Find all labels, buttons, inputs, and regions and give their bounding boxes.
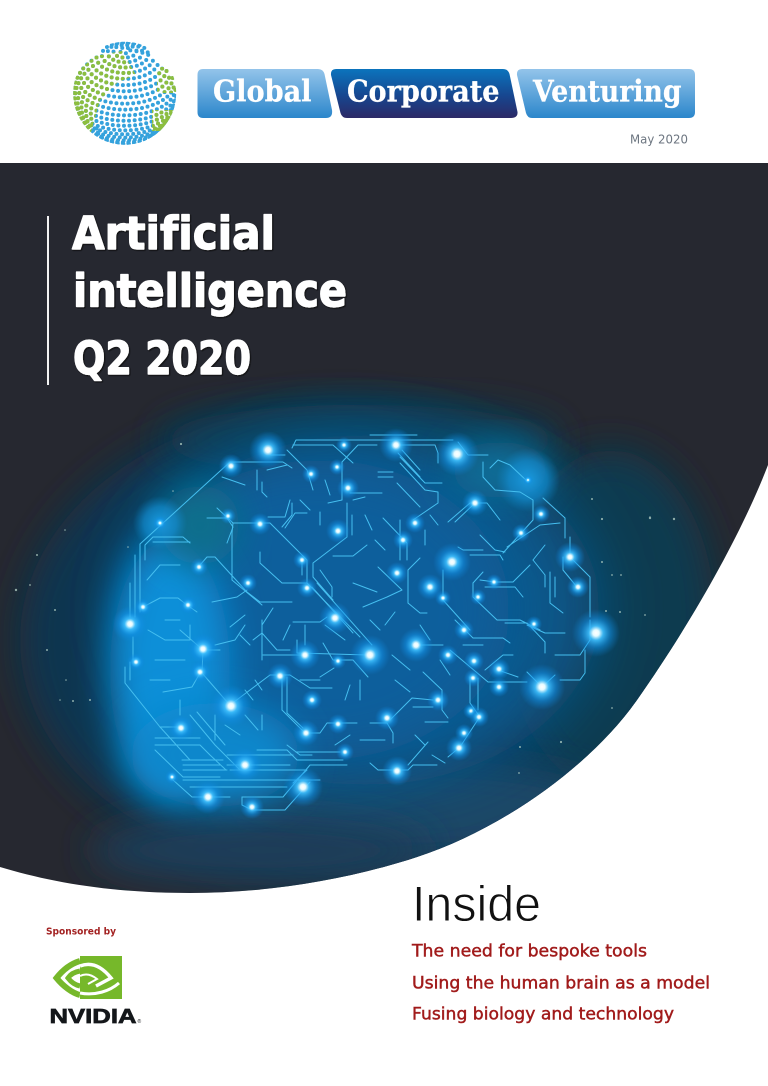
title: Artificial intelligence Q2 2020: intelligence — [73, 264, 347, 318]
sponsor label: Sponsored by — [46, 926, 117, 938]
heading: Inside: Inside — [412, 876, 541, 932]
icon: NVIDIA logo: ® — [138, 1018, 142, 1025]
icon: dotted globe logo — [74, 42, 176, 144]
logo tab: Corporate: Corporate — [347, 74, 500, 110]
contents list: The need for bespoke tools — [411, 942, 647, 962]
icon: NVIDIA logo — [50, 956, 142, 1028]
title: Artificial intelligence Q2 2020: Q2 2020 — [73, 332, 251, 385]
circuit traces forming the brain — [125, 435, 590, 810]
contents list: Fusing biology and technology — [412, 1004, 674, 1024]
panel: dark cover image with brain — [0, 163, 768, 903]
glowing circuit nodes — [112, 428, 620, 819]
logo tab: Corporate — [331, 69, 518, 118]
title: Artificial intelligence Q2 2020 — [72, 207, 347, 385]
contents list: Using the human brain as a model — [412, 974, 710, 994]
background stars — [15, 443, 675, 774]
logo: Global Corporate Venturing wordmark — [198, 69, 695, 118]
NVIDIA wordmark: NVIDIA — [50, 1005, 137, 1028]
logo tab: Venturing: Venturing — [532, 74, 682, 110]
logo tab: Global: Global — [213, 74, 312, 110]
logo tab: Global — [198, 69, 332, 118]
title: Artificial intelligence Q2 2020: Artificial — [72, 207, 275, 260]
vertical title rule — [47, 216, 49, 385]
dark background — [0, 163, 768, 903]
logo tab: Venturing — [517, 69, 695, 118]
contents list — [411, 942, 710, 1024]
icon: green eye square — [56, 956, 122, 999]
issue date: May 2020 — [630, 132, 688, 146]
brain glow background — [20, 405, 715, 885]
